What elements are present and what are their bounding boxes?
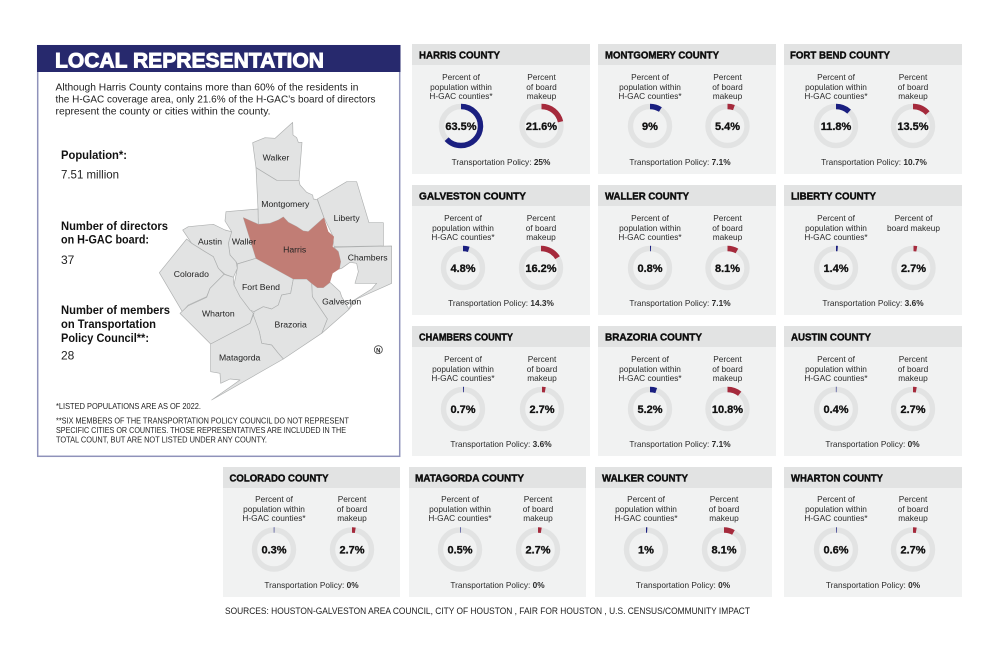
panel: Harris County: H-GAC counties* xyxy=(429,91,493,101)
panel: Montgomery County: makeup xyxy=(713,91,743,101)
panel: Waller County: Percent xyxy=(713,213,742,223)
panel: Brazoria County: Transportation Policy: 7.1% xyxy=(629,439,731,449)
panel: Fort Bend County: Percent xyxy=(899,72,928,82)
panel: Colorado County: makeup xyxy=(337,513,367,523)
panel: Walker County: Transportation Policy: 0% xyxy=(636,580,731,590)
panel: Liberty County: board makeup xyxy=(887,223,940,233)
county map xyxy=(159,122,392,400)
county map: Colorado xyxy=(174,269,209,279)
panel: Walker County: population within xyxy=(615,504,677,514)
panel: Galveston County: makeup xyxy=(526,232,556,242)
panel: Harris County xyxy=(412,44,590,174)
panel: Matagorda County: population within xyxy=(429,504,491,514)
panel: Brazoria County: Percent of xyxy=(631,354,670,364)
panel: Walker County: Percent xyxy=(710,494,739,504)
panel: Liberty County: population within xyxy=(805,223,867,233)
stat: population xyxy=(61,148,127,182)
panel: Galveston County: H-GAC counties* xyxy=(431,232,495,242)
panel: Colorado County: Percent of xyxy=(255,494,294,504)
panel: Matagorda County: 2.7% xyxy=(525,544,551,556)
panel: Colorado County: H-GAC counties* xyxy=(242,513,306,523)
panel: Austin County: Percent xyxy=(899,354,928,364)
panel: Fort Bend County: FORT BEND COUNTY xyxy=(790,50,890,62)
intro text: the H-GAC coverage area, only 21.6% of the H-GAC’s board of directors xyxy=(56,94,376,106)
panel: Fort Bend County: Transportation Policy: 10.7% xyxy=(821,157,928,167)
panel: Chambers County xyxy=(412,326,590,456)
panel: Waller County xyxy=(598,185,776,315)
panel: Waller County: WALLER COUNTY xyxy=(605,192,689,202)
panel: Austin County: of board xyxy=(898,364,929,374)
county map: Matagorda xyxy=(219,353,261,363)
panel: Galveston County: of board xyxy=(526,223,557,233)
panel: Wharton County: 2.7% xyxy=(900,544,926,556)
panel: Fort Bend County: population within xyxy=(805,82,867,92)
panel: Waller County: makeup xyxy=(713,232,743,242)
panel: Harris County: Transportation Policy: 25% xyxy=(452,157,551,167)
panel: Montgomery County: Percent xyxy=(713,72,742,82)
panel: Colorado County: population within xyxy=(243,504,305,514)
panel: Austin County xyxy=(784,326,962,456)
panel: Brazoria County: population within xyxy=(619,364,681,374)
panel: local representation xyxy=(37,45,400,456)
panel: Matagorda County: MATAGORDA COUNTY xyxy=(415,474,524,484)
panel: Wharton County: makeup xyxy=(898,513,928,523)
county map: Brazoria xyxy=(275,319,307,329)
stat: transportation policy council members: 28 xyxy=(61,348,75,362)
panel: Austin County: population within xyxy=(805,364,867,374)
panel: Galveston County: population within xyxy=(432,223,494,233)
intro text xyxy=(56,82,376,118)
panel: Walker County: WALKER COUNTY xyxy=(602,474,688,484)
panel: Chambers County: 2.7% xyxy=(529,404,555,416)
panel: Walker County: H-GAC counties* xyxy=(614,513,678,523)
panel: Wharton County: Percent xyxy=(899,494,928,504)
panel: Colorado County: 2.7% xyxy=(339,544,365,556)
stat: directors: 37 xyxy=(61,253,75,267)
panel: Austin County: 2.7% xyxy=(900,404,926,416)
panel: Walker County: 1% xyxy=(638,544,654,556)
panel: Waller County: 8.1% xyxy=(715,263,740,275)
panel: Fort Bend County xyxy=(784,44,962,174)
panel: Austin County: Percent of xyxy=(817,354,856,364)
panel: Colorado County: 0.3% xyxy=(261,544,287,556)
footnotes: TOTAL COUNT, BUT ARE NOT LISTED UNDER ANY COUNTY. xyxy=(56,434,267,444)
panel: Galveston County: 16.2% xyxy=(525,263,557,275)
stat: transportation policy council members: on Transportation xyxy=(61,317,156,331)
panel: Chambers County: Percent of xyxy=(444,354,483,364)
panel: Walker County: Percent of xyxy=(627,494,666,504)
panel: Walker County: makeup xyxy=(709,513,739,523)
panel: Wharton County: Transportation Policy: 0% xyxy=(826,580,921,590)
panel: Brazoria County xyxy=(598,326,776,456)
panel: Harris County: of board xyxy=(526,82,557,92)
county map: Fort Bend xyxy=(242,282,280,292)
panel: Wharton County: population within xyxy=(805,504,867,514)
panel: Harris County: makeup xyxy=(527,91,557,101)
panel: Fort Bend County: makeup xyxy=(898,91,928,101)
panel: Chambers County: 0.7% xyxy=(450,404,476,416)
county map: Wharton xyxy=(202,308,235,318)
panel: Austin County: H-GAC counties* xyxy=(804,373,868,383)
panel: Galveston County: GALVESTON COUNTY xyxy=(419,192,526,202)
county map: Walker xyxy=(263,152,289,162)
panel: Galveston County: 4.8% xyxy=(450,263,476,275)
sources line: SOURCES: HOUSTON-GALVESTON AREA COUNCIL, CITY OF HOUSTON , FAIR FOR HOUSTON , U.S. CENSUS/COMMUNITY IMPACT xyxy=(225,606,750,616)
intro text: represent the county or cities within the county. xyxy=(56,106,270,118)
county map: Chambers xyxy=(348,252,388,262)
panel: Waller County: 0.8% xyxy=(637,263,663,275)
panel: Wharton County: of board xyxy=(898,504,929,514)
stat: directors xyxy=(61,219,168,267)
panel: Waller County: Percent of xyxy=(631,213,670,223)
panel: Austin County: Transportation Policy: 0% xyxy=(825,439,920,449)
panel: Liberty County xyxy=(784,185,962,315)
panel: Montgomery County: MONTGOMERY COUNTY xyxy=(605,50,719,62)
title banner: LOCAL REPRESENTATION xyxy=(55,50,324,72)
panel: Fort Bend County: of board xyxy=(898,82,929,92)
county map: Montgomery xyxy=(261,199,310,209)
footnotes xyxy=(56,401,349,444)
panel: Montgomery County xyxy=(598,44,776,174)
panel: Liberty County: Percent of xyxy=(817,213,856,223)
panel: Colorado County: Transportation Policy: 0% xyxy=(264,580,359,590)
panel: Harris County: Percent of xyxy=(442,72,481,82)
stat: transportation policy council members: Policy Council**: xyxy=(61,331,149,345)
panel: Austin County: makeup xyxy=(898,373,928,383)
panel: Montgomery County: 9% xyxy=(642,121,658,133)
panel: Liberty County: H-GAC counties* xyxy=(804,232,868,242)
stat: population: Population*: xyxy=(61,148,127,162)
panel: Walker County xyxy=(595,467,772,597)
stat: directors: Number of directors xyxy=(61,219,168,233)
panel: Fort Bend County: 11.8% xyxy=(821,121,852,133)
panel: Colorado County xyxy=(223,467,400,597)
panel: Fort Bend County: Percent of xyxy=(817,72,856,82)
panel: Austin County: 0.4% xyxy=(823,404,849,416)
panel: Montgomery County: Transportation Policy: 7.1% xyxy=(629,157,731,167)
panel: Wharton County: H-GAC counties* xyxy=(804,513,868,523)
footnotes: SPECIFIC CITIES OR COUNTIES. THOSE REPRESENTATIVES ARE INCLUDED IN THE xyxy=(56,425,346,435)
panel: Chambers County: CHAMBERS COUNTY xyxy=(419,332,513,344)
panel: Brazoria County: makeup xyxy=(713,373,743,383)
panel: Brazoria County: H-GAC counties* xyxy=(618,373,682,383)
panel: Galveston County: Percent of xyxy=(444,213,483,223)
panel: Montgomery County: population within xyxy=(619,82,681,92)
panel: Brazoria County: BRAZORIA COUNTY xyxy=(605,332,702,344)
panel: Chambers County: Transportation Policy: 3.6% xyxy=(450,439,552,449)
stat: population: 7.51 million xyxy=(61,168,119,182)
panel: Fort Bend County: H-GAC counties* xyxy=(804,91,868,101)
panel: Chambers County: of board xyxy=(527,364,558,374)
panel: Galveston County xyxy=(412,185,590,315)
icon: north marker xyxy=(374,346,382,354)
panel: Wharton County xyxy=(784,467,962,597)
panel: Wharton County: Percent of xyxy=(817,494,856,504)
panel: Liberty County: 1.4% xyxy=(823,263,849,275)
panel: Harris County: population within xyxy=(430,82,492,92)
panel: Matagorda County: Percent of xyxy=(441,494,480,504)
panel: Matagorda County: makeup xyxy=(523,513,553,523)
panel: Chambers County: H-GAC counties* xyxy=(431,373,495,383)
panel: Colorado County: of board xyxy=(337,504,368,514)
panel: Harris County: HARRIS COUNTY xyxy=(419,50,500,62)
panel: Fort Bend County: 13.5% xyxy=(897,121,929,133)
panel: Galveston County: Transportation Policy: 14.3% xyxy=(448,298,555,308)
footnotes: **SIX MEMBERS OF THE TRANSPORTATION POLICY COUNCIL DO NOT REPRESENT xyxy=(56,416,349,426)
panel: Waller County: population within xyxy=(619,223,681,233)
intro text: Although Harris County contains more than 60% of the residents in xyxy=(56,82,359,94)
panel: Matagorda County: of board xyxy=(523,504,554,514)
stat: transportation policy council members xyxy=(61,303,170,362)
county map: Harris xyxy=(283,245,307,255)
panel: Harris County: 21.6% xyxy=(526,121,557,133)
panel: Liberty County: 2.7% xyxy=(901,263,926,275)
panel: Wharton County: WHARTON COUNTY xyxy=(791,474,883,484)
stat: directors: on H-GAC board: xyxy=(61,232,149,246)
panel: Wharton County: 0.6% xyxy=(823,544,849,556)
footnotes: *LISTED POPULATIONS ARE AS OF 2022. xyxy=(56,401,201,411)
panel: Montgomery County: of board xyxy=(712,82,743,92)
stat: transportation policy council members: Number of members xyxy=(61,303,170,317)
county map: Liberty xyxy=(334,213,360,223)
panel: Colorado County: COLORADO COUNTY xyxy=(230,474,329,484)
panel: Matagorda County: 0.5% xyxy=(447,544,473,556)
panel: Liberty County: Transportation Policy: 3.6% xyxy=(822,298,924,308)
panel: Harris County: Percent xyxy=(527,72,556,82)
panel: Montgomery County: Percent of xyxy=(631,72,670,82)
panel: Brazoria County: 5.2% xyxy=(637,404,663,416)
panel: Austin County: AUSTIN COUNTY xyxy=(791,332,871,344)
panel: Waller County: of board xyxy=(712,223,743,233)
panel: Matagorda County: Percent xyxy=(524,494,553,504)
panel: Montgomery County: 5.4% xyxy=(715,121,740,133)
panel: Chambers County: population within xyxy=(432,364,494,374)
county map: Austin xyxy=(198,236,222,246)
panel: Waller County: H-GAC counties* xyxy=(618,232,682,242)
county map: Galveston xyxy=(322,296,361,306)
panel: Walker County: 8.1% xyxy=(711,544,737,556)
panel: Brazoria County: 10.8% xyxy=(712,404,743,416)
panel: Colorado County: Percent xyxy=(338,494,367,504)
panel: Harris County: 63.5% xyxy=(445,121,477,133)
title banner xyxy=(37,45,400,72)
panel: Chambers County: makeup xyxy=(527,373,557,383)
panel: Brazoria County: of board xyxy=(712,364,743,374)
panel: Matagorda County xyxy=(409,467,586,597)
panel: Brazoria County: Percent xyxy=(713,354,742,364)
panel: Chambers County: Percent xyxy=(528,354,557,364)
panel: Liberty County: Percent of xyxy=(895,213,933,223)
panel: Montgomery County: H-GAC counties* xyxy=(618,91,682,101)
panel: Walker County: of board xyxy=(709,504,740,514)
icon: north marker: N xyxy=(376,348,380,354)
panel: Galveston County: Percent xyxy=(527,213,556,223)
panel: Liberty County: LIBERTY COUNTY xyxy=(791,192,876,202)
county map: Waller xyxy=(232,236,256,246)
panel: Waller County: Transportation Policy: 7.1% xyxy=(629,298,731,308)
panel: Matagorda County: Transportation Policy: 0% xyxy=(450,580,545,590)
panel: Matagorda County: H-GAC counties* xyxy=(428,513,492,523)
